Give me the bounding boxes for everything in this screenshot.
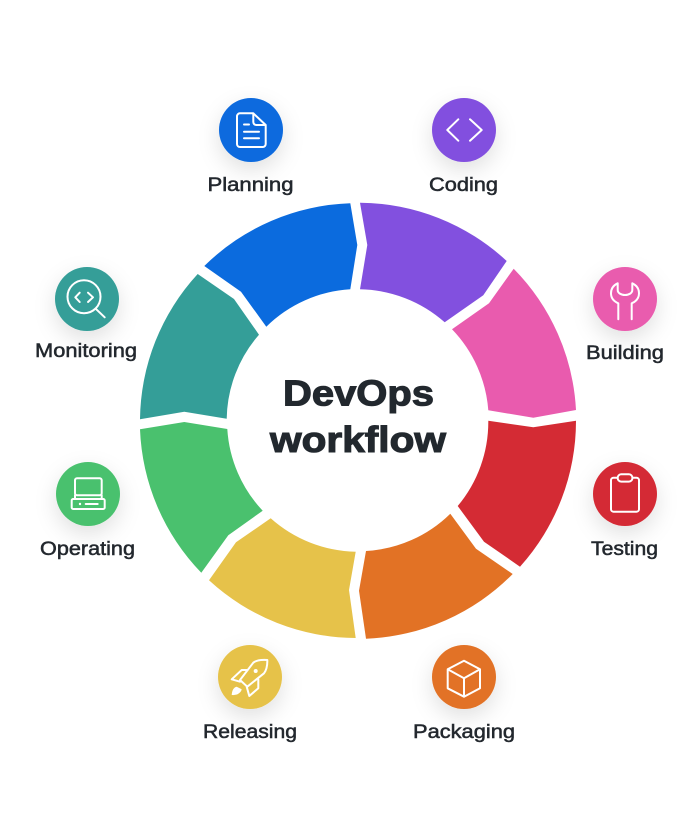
label: testing: Testing [591,539,658,560]
segment: coding [360,203,507,322]
node: packaging [413,645,515,743]
node: operating [40,462,135,560]
icon: code brackets [447,119,482,141]
segment: operating [140,422,263,573]
icon: wrench [611,283,639,319]
icon: document [237,113,266,147]
label: releasing: Releasing [203,722,297,743]
icon: clipboard [611,474,639,512]
label: operating: Operating [40,539,135,560]
node: planning [208,98,294,196]
segment: releasing [209,518,356,638]
icon: rocket [232,660,267,696]
segment: testing [458,421,576,567]
title: workflow [269,419,447,460]
node: coding [429,98,498,196]
icon: computer [72,478,105,509]
segment: planning [204,203,357,327]
icon: magnifier with code [68,280,105,317]
label: packaging: Packaging [413,722,515,743]
segment: building [452,269,576,418]
label: monitoring: Monitoring [35,341,137,362]
node: releasing [203,645,297,743]
ring diagram [140,203,576,639]
label: planning: Planning [208,175,294,196]
title [269,372,447,460]
title: DevOps [283,372,434,414]
segment: packaging [359,514,513,639]
node: monitoring [35,267,137,362]
label: building: Building [586,343,664,364]
node: building [586,267,664,364]
icon: box [448,661,480,697]
segment: monitoring [140,274,259,419]
label: coding: Coding [429,175,498,196]
node: testing [591,462,658,560]
